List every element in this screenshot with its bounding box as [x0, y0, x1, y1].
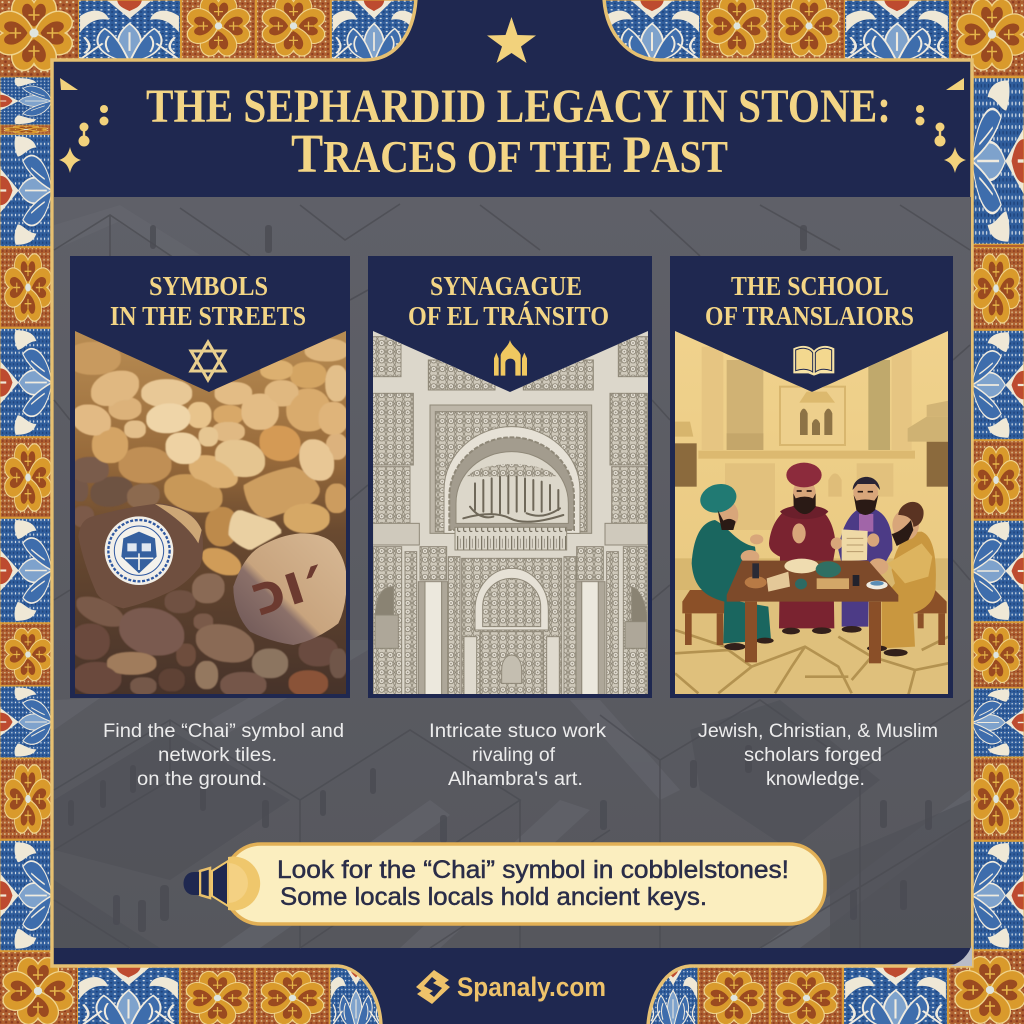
caption: knowledge. — [766, 769, 865, 790]
scholar: ochre robe — [867, 502, 936, 656]
caption: Find the “Chai” symbol and — [103, 721, 344, 742]
icon: logo mark — [416, 970, 450, 1004]
heading: OF TRANSLAIORS — [705, 301, 914, 331]
title: THE SEPHARDID LEGACY IN STONE: — [146, 80, 891, 133]
scholar: green robe — [692, 480, 774, 650]
caption — [698, 721, 938, 790]
icon: star of david — [191, 342, 225, 380]
icon: open book — [793, 346, 834, 376]
scholar: red robe — [769, 463, 836, 634]
heading: IN THE STREETS — [110, 301, 306, 331]
scholar: purple robe — [831, 477, 892, 633]
caption: network tiles. — [158, 745, 277, 766]
corner fold — [950, 945, 972, 966]
right ornaments — [916, 78, 966, 173]
stucco illustration — [373, 331, 648, 695]
left ornaments — [59, 78, 108, 173]
street-map background — [54, 197, 971, 948]
heading: SYMBOLS — [149, 271, 268, 301]
bench right — [913, 590, 947, 645]
icon: top star — [487, 17, 536, 63]
logo — [416, 970, 606, 1004]
scholars illustration — [675, 331, 948, 695]
caption: rivaling of — [472, 745, 556, 766]
panel: school of translators — [670, 256, 953, 790]
cobblestone illustration: ׳וכ — [243, 543, 336, 629]
icon: megaphone — [184, 856, 260, 910]
caption — [103, 721, 344, 790]
callout text: Some locals locals hold ancient keys. — [280, 883, 707, 911]
callout text: Look for the “Chai” symbol in cobblelstones! — [277, 856, 789, 884]
caption — [429, 721, 607, 790]
caption: on the ground. — [137, 769, 267, 790]
caption: Intricate stuco work — [429, 721, 607, 742]
heading: OF EL TRÁNSITO — [408, 301, 609, 331]
panel: symbols in the streets — [67, 256, 350, 790]
caption: scholars forged — [744, 745, 882, 766]
title — [146, 80, 891, 184]
panel: synagogue of el transito — [368, 256, 652, 790]
title: TRACES OF THE PAST — [291, 123, 728, 184]
heading — [408, 271, 609, 331]
heading — [110, 271, 306, 331]
callout text — [277, 856, 789, 911]
callout: tip pill — [184, 844, 825, 924]
caption: Jewish, Christian, & Muslim — [698, 721, 938, 742]
cobblestone illustration — [67, 331, 347, 697]
heading — [705, 271, 914, 331]
bench left — [682, 590, 725, 645]
logo: Spanaly.com — [457, 972, 606, 1002]
icon: synagogue — [494, 340, 527, 376]
floor — [675, 558, 948, 695]
table — [727, 559, 898, 663]
caption: Alhambra's art. — [448, 769, 583, 790]
heading: SYNAGAGUE — [430, 271, 582, 301]
heading: THE SCHOOL — [731, 271, 889, 301]
